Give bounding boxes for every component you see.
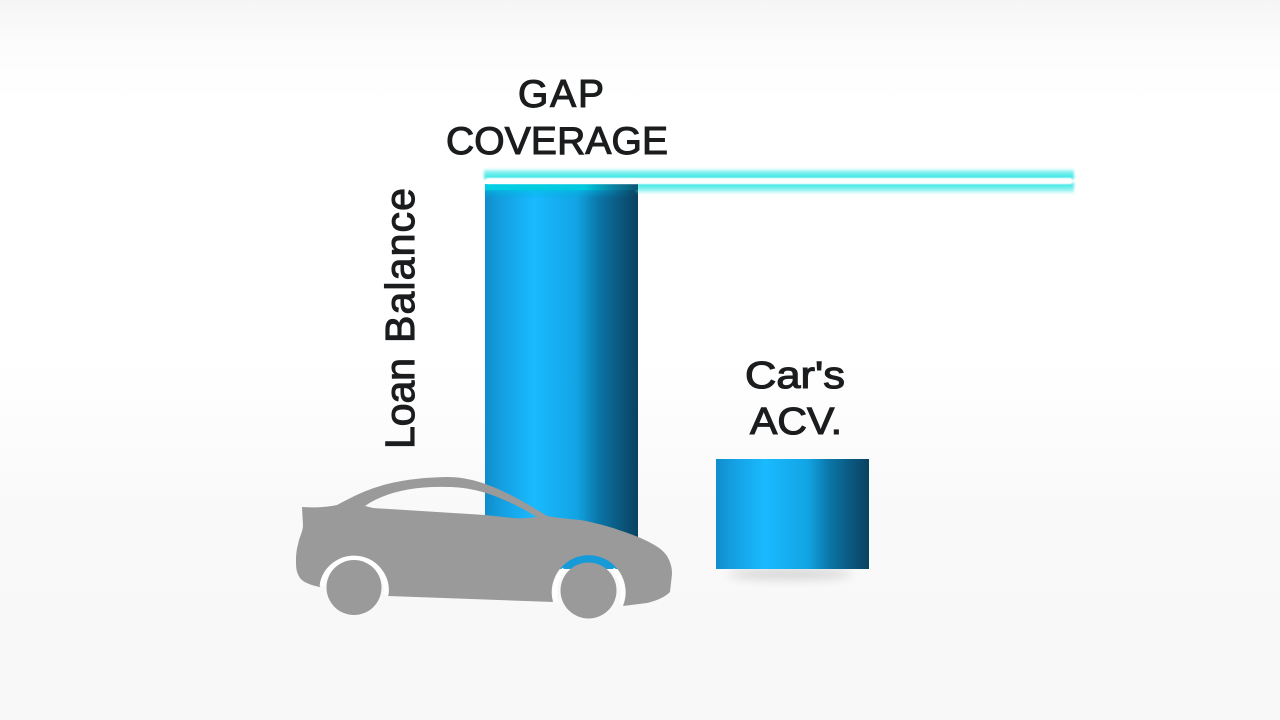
label: car's ACV [745,355,845,443]
rear wheel arch ring right [613,569,623,604]
tall bar: loan balance [485,184,638,569]
shadow: short bar [728,568,852,580]
blue patch visible through rear wheel arch [558,550,618,569]
label: loan balance: Loan [377,358,423,449]
front wheel [326,560,382,615]
label: loan balance [377,188,423,449]
glowing line: gap coverage level [484,169,1074,194]
heading: gap coverage: GAP [518,73,604,116]
label: car's ACV: ACV. [750,401,842,443]
heading: gap coverage: COVERAGE [446,120,668,163]
label: car's ACV: Car's [745,355,845,397]
label: loan balance: Balance [377,188,423,343]
icon: car silhouette [296,477,672,618]
rear wheel arch ring left [555,569,564,602]
car body with window and wheel arch cut-outs [296,477,672,606]
rear wheel [560,562,616,618]
short bar: car's ACV [716,459,869,569]
front wheel arch ring [322,558,386,595]
heading: gap coverage [446,73,668,163]
